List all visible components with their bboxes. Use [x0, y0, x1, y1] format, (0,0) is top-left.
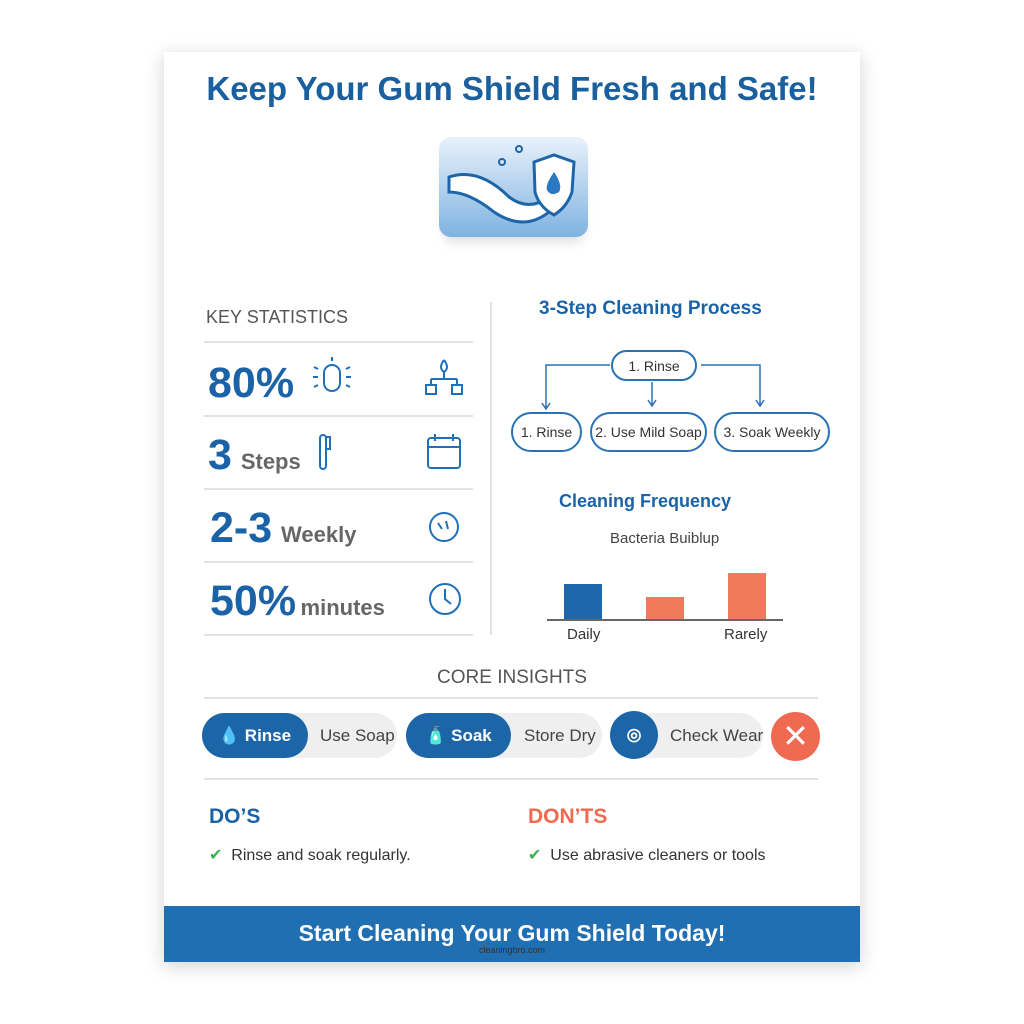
- stat: 50% minutes: 50% minutes: [210, 577, 385, 625]
- don'ts: ✔ Use abrasive cleaners or tools: [528, 847, 766, 864]
- insight: rinse / use soap: 💧 Rinse: [219, 726, 291, 744]
- icon: cross: ✕: [782, 718, 809, 754]
- heading: 3-step cleaning process: 3-Step Cleaning Process: [539, 298, 762, 319]
- heading: core insights: CORE INSIGHTS: [437, 667, 587, 688]
- icon: cross: [771, 712, 820, 761]
- flowchart: 2. Use Mild Soap: [595, 424, 702, 440]
- flowchart: 3. Soak Weekly: [723, 424, 820, 440]
- insight: check wear: Check Wear: [670, 726, 763, 744]
- insight: rinse / use soap: Use Soap: [320, 726, 395, 744]
- flowchart: 1. Rinse: [628, 358, 680, 374]
- stat: 2-3 weekly: 2-3 Weekly: [210, 504, 356, 552]
- insight: soak / store dry: [406, 713, 602, 758]
- don'ts: DON’TS: [528, 805, 607, 828]
- heading: cleaning frequency: Cleaning Frequency: [559, 491, 731, 511]
- do's: DO’S: [209, 805, 260, 828]
- stat: 3 steps: 3 Steps: [208, 431, 301, 479]
- heading: key statistics: KEY STATISTICS: [206, 307, 348, 327]
- footer banner: [164, 906, 860, 962]
- flowchart: [511, 350, 830, 452]
- footer banner: Start Cleaning Your Gum Shield Today!: [299, 920, 725, 946]
- vertical divider: [490, 302, 492, 635]
- insight: rinse / use soap: [202, 713, 397, 758]
- stat: 80%: 80%: [208, 359, 294, 407]
- do's: ✔ Rinse and soak regularly.: [209, 847, 411, 864]
- don'ts: [528, 805, 766, 864]
- card: [164, 52, 860, 962]
- insight: soak / store dry: Store Dry: [524, 726, 596, 744]
- bar chart: [547, 530, 783, 643]
- title: Keep Your Gum Shield Fresh and Safe!: [206, 70, 818, 107]
- do's: [209, 805, 411, 864]
- bar chart: Bacteria Buiblup: [610, 530, 719, 547]
- footer banner: cleaningbro.com: [479, 945, 545, 955]
- icons: [313, 357, 463, 615]
- insight: check wear: ◎: [627, 725, 641, 744]
- bar chart: Rarely: [724, 626, 767, 643]
- insight: soak / store dry: 🧴 Soak: [425, 726, 492, 744]
- flowchart: 1. Rinse: [521, 424, 572, 440]
- panel: key statistics: [204, 307, 473, 636]
- icon: gum shield hero: [439, 137, 588, 237]
- insight: check wear: [610, 713, 763, 758]
- bar chart: Daily: [567, 626, 600, 643]
